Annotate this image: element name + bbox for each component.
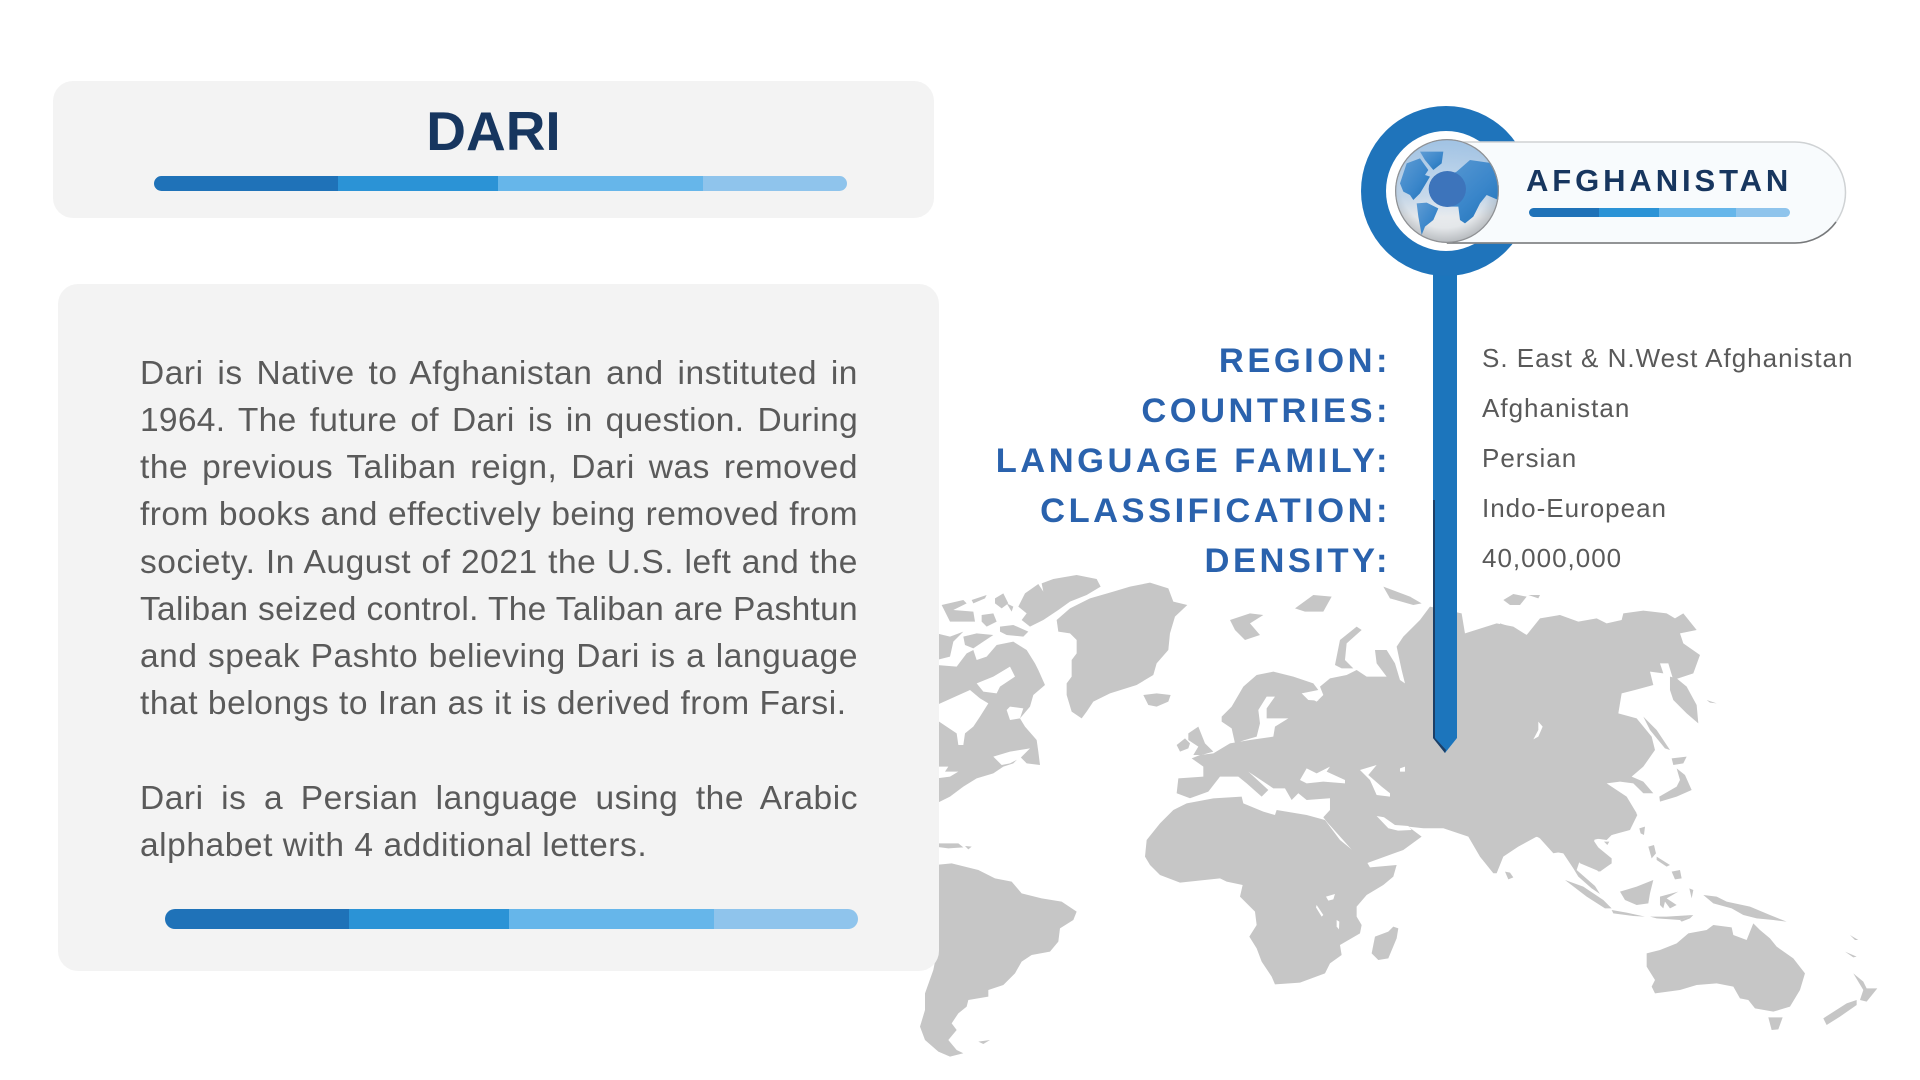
text block: description: from books and effectively being removed from	[140, 496, 858, 533]
text block: description: society. In August of 2021 the U.S. left and the	[140, 544, 858, 580]
badge colour bar	[1529, 208, 1790, 217]
panel: description card	[58, 284, 939, 971]
description colour bar	[165, 909, 858, 929]
text block: description: Dari is a Persian language using the Arabic	[140, 780, 858, 817]
heading: Dari: DARI	[426, 100, 561, 162]
value: classification: Indo-European	[1482, 493, 1667, 523]
value: density: 40,000,000	[1482, 543, 1622, 573]
label: language family: LANGUAGE FAMILY:	[996, 442, 1391, 480]
badge pill	[1447, 142, 1846, 243]
value: region: S. East & N.West Afghanistan	[1482, 343, 1853, 373]
label: density: DENSITY:	[1205, 542, 1391, 580]
country name: AFGHANISTAN	[1526, 163, 1792, 198]
pin	[1361, 106, 1531, 753]
value: language family: Persian	[1482, 443, 1577, 473]
text block: description: the previous Taliban reign, Dari was removed	[140, 449, 858, 486]
label: classification: CLASSIFICATION:	[1040, 492, 1391, 530]
text block: description: 1964. The future of Dari is in question. During	[140, 402, 858, 439]
map pin and country badge	[1361, 106, 1846, 753]
icon: globe	[1395, 139, 1499, 243]
label: region: REGION:	[1219, 342, 1391, 380]
text block: description: alphabet with 4 additional letters.	[140, 827, 647, 864]
text block: description	[140, 354, 858, 864]
text block: description: and speak Pashto believing Dari is a language	[140, 638, 858, 675]
panel: title card	[53, 81, 934, 218]
title colour bar	[154, 176, 847, 191]
label: countries: COUNTRIES:	[1141, 392, 1391, 430]
text block: description: Taliban seized control. The Taliban are Pashtun	[140, 591, 858, 628]
text block: description: that belongs to Iran as it is derived from Farsi.	[140, 685, 847, 722]
text block: description: Dari is Native to Afghanistan and instituted in	[140, 354, 858, 392]
value: countries: Afghanistan	[1482, 393, 1630, 423]
